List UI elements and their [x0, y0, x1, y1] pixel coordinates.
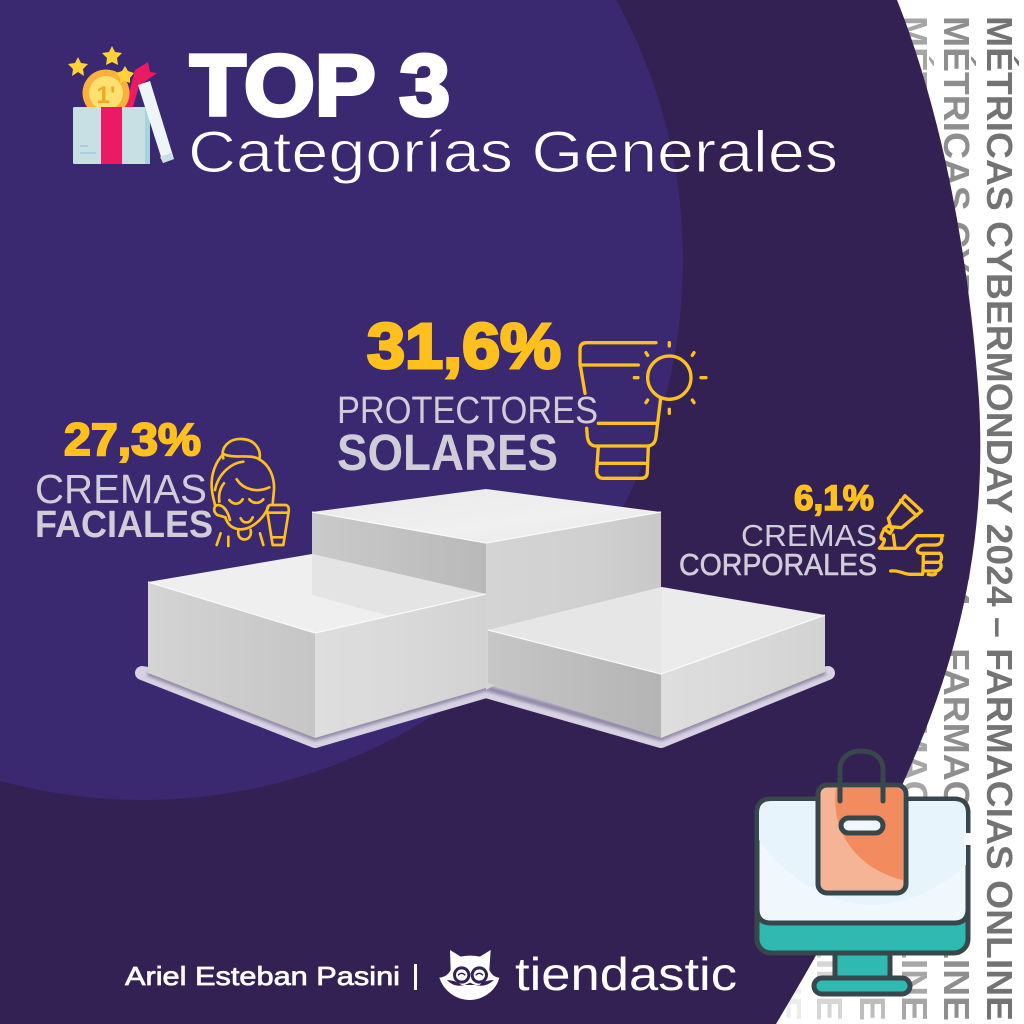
repeated vertical text: MÉTRICAS CYBERMONDAY: MÉTRICAS CYBERMONDAY 2024 – FARMACIAS ONLINE: [809, 16, 850, 1021]
label PROTECTORES: PROTECTORES: [337, 390, 598, 432]
title line: TOP 3: TOP 3: [190, 38, 450, 134]
value 6,1%: 6,1%: [794, 479, 874, 518]
middle box (first place): [312, 489, 661, 690]
footer author name: Ariel Esteban Pasini: [125, 961, 400, 991]
icon: gift box with medal: 1': [96, 82, 116, 109]
shopping bag: [818, 751, 906, 893]
label CREMAS: CREMAS: [35, 466, 207, 512]
tiendastic wordmark: tiendastic: [515, 948, 737, 1000]
monitor foot: [814, 978, 910, 994]
podium shadow: [142, 660, 828, 741]
podium: [142, 489, 828, 741]
label SOLARES: SOLARES: [337, 424, 558, 481]
repeated vertical text: MÉTRICAS CYBERMONDAY: MÉTRICAS CYBERMONDAY 2024 – FARMACIAS ONLINE: [936, 16, 977, 1021]
tiendastic owl logo: [439, 950, 499, 1000]
repeated vertical text: MÉTRICAS CYBERMONDAY: MÉTRICAS CYBERMONDAY 2024 – FARMACIAS ONLINE: [979, 16, 1020, 1021]
lighter purple circle: [0, 0, 683, 800]
repeated vertical text: MÉTRICAS CYBERMONDAY: MÉTRICAS CYBERMONDAY 2024 – FARMACIAS ONLINE: [768, 16, 809, 1021]
screen shading: [759, 801, 966, 905]
value 31,6%: 31,6%: [367, 310, 561, 382]
left box (second place): [148, 554, 486, 738]
right box (third place): [488, 587, 825, 738]
monitor screen: [757, 799, 968, 923]
icon: gift box with medal: [68, 46, 174, 164]
title: [188, 38, 838, 185]
stat: cremas faciales: [35, 414, 213, 546]
subtitle: Categorías Generales: Categorías Generales: [188, 120, 838, 185]
gap in screen border: [964, 833, 971, 845]
footer separator: [414, 964, 417, 990]
icon: hand squeezing cream tube: [879, 496, 943, 575]
icon: woman with towel and cream: [212, 439, 289, 546]
repeated vertical text: MÉTRICAS CYBERMONDAY: MÉTRICAS CYBERMONDAY 2024 – FARMACIAS ONLINE: [852, 16, 893, 1021]
icon: computer monitor with shopping bag: [757, 751, 971, 994]
repeated vertical text: MÉTRICAS CYBERMONDAY: [768, 16, 1020, 1021]
repeated vertical text: MÉTRICAS CYBERMONDAY: MÉTRICAS CYBERMONDAY 2024 – FARMACIAS ONLINE: [894, 16, 935, 1021]
monitor body: [757, 799, 968, 953]
label CORPORALES: CORPORALES: [679, 547, 877, 582]
stat: cremas corporales: [679, 479, 877, 582]
value 27,3%: 27,3%: [64, 414, 201, 465]
icon: sunscreen tube and sun: [580, 343, 706, 478]
label FACIALES: FACIALES: [35, 504, 213, 546]
stat: protectores solares: [337, 310, 598, 481]
monitor stand: [835, 950, 890, 980]
label CREMAS: CREMAS: [741, 518, 877, 553]
